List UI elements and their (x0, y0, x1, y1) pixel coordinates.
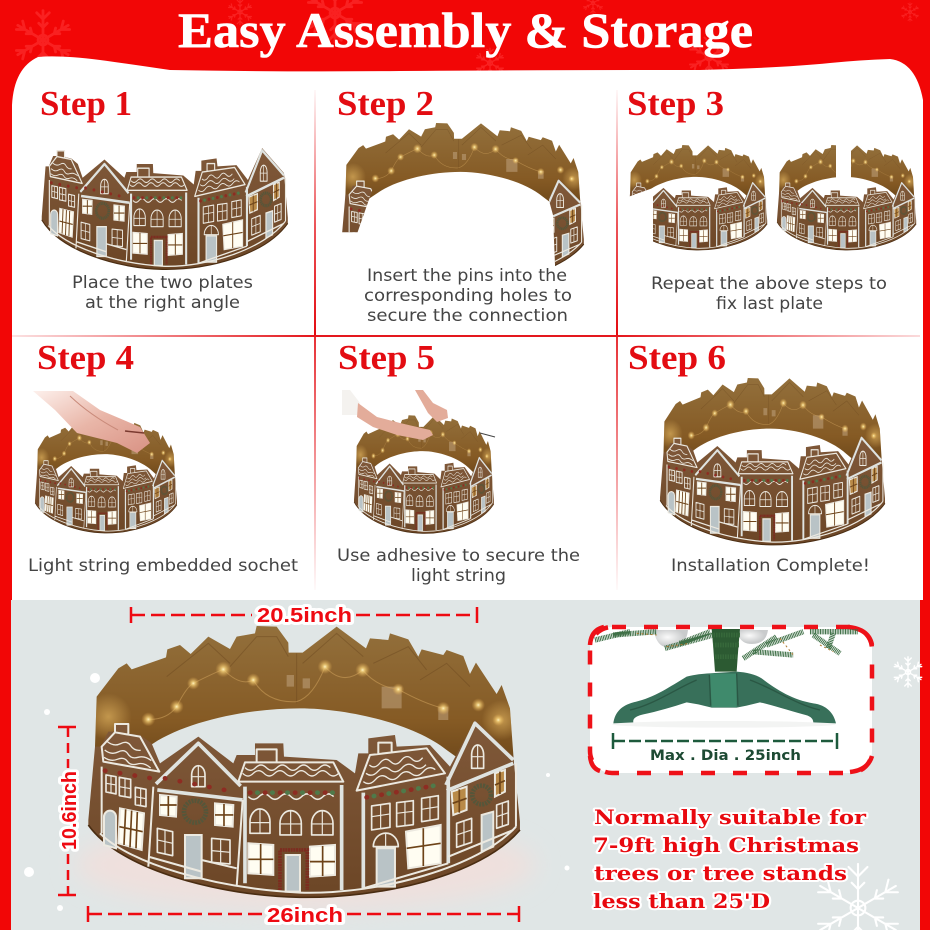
caption: step 2: secure the connection (367, 306, 568, 326)
caption: step 6: Installation Complete! (671, 556, 870, 576)
header snowflakes (16, 0, 918, 78)
red note text: trees or tree stands (594, 861, 847, 885)
caption: step 2: Insert the pins into the (367, 266, 567, 286)
soft shadow under ring (75, 820, 535, 910)
white snow panel (12, 56, 923, 600)
candy stripe border (590, 627, 872, 773)
caption: step 5: light string (411, 566, 506, 586)
dimension: top 20.5inch: 20.5inch (257, 605, 352, 627)
caption: step 3: fix last plate (716, 294, 823, 314)
caption: step 3: Repeat the above steps to (651, 274, 887, 294)
tree branches (595, 632, 858, 658)
image: step 2 back plates (342, 123, 584, 266)
max diameter line (613, 733, 837, 749)
red note text: 7-9ft high Christmas (593, 833, 859, 857)
tree stand card (590, 627, 872, 773)
dimension: bottom 26inch (88, 905, 519, 927)
caption: step 2: corresponding holes to (364, 286, 572, 306)
heading: step 2: Step 2 (337, 84, 434, 123)
image: step 5 ring with hands (342, 390, 495, 533)
image: step 6 complete ring (658, 378, 886, 545)
caption: step 1: Place the two plates (72, 273, 253, 293)
grey bottom panel (11, 600, 920, 930)
green stand (612, 672, 836, 728)
baubles (654, 630, 768, 648)
image: step 1 front plate (42, 148, 288, 269)
dimension: top 20.5inch (131, 605, 477, 627)
heading: step 4: Step 4 (37, 338, 134, 377)
red note text: Normally suitable for (594, 805, 867, 829)
heading: step 1: Step 1 (40, 84, 132, 123)
heading: step 3: Step 3 (627, 84, 724, 123)
dimension: height 10.6inch (58, 727, 81, 895)
panel grid lines (12, 90, 920, 590)
caption: step 1: at the right angle (85, 293, 240, 313)
dimension: bottom 26inch: 26inch (267, 905, 343, 927)
tree trunk (712, 629, 740, 672)
caption: step 4: Light string embedded sochet (28, 556, 298, 576)
heading: step 5: Step 5 (338, 338, 435, 377)
image: step 4 ring with hands (33, 391, 178, 533)
image: step 3 two rings (625, 138, 917, 254)
white dots (24, 673, 570, 911)
max diameter label: Max . Dia . 25inch (650, 748, 801, 764)
title: Easy Assembly & Storage (178, 2, 753, 58)
caption: step 5: Use adhesive to secure the (337, 546, 580, 566)
red note text: less than 25'D (593, 889, 770, 913)
heading: step 6: Step 6 (628, 338, 726, 377)
bottom panel snowflakes (818, 657, 922, 930)
large ring photo (85, 626, 522, 897)
dimension: height 10.6inch: 10.6inch (59, 771, 81, 850)
